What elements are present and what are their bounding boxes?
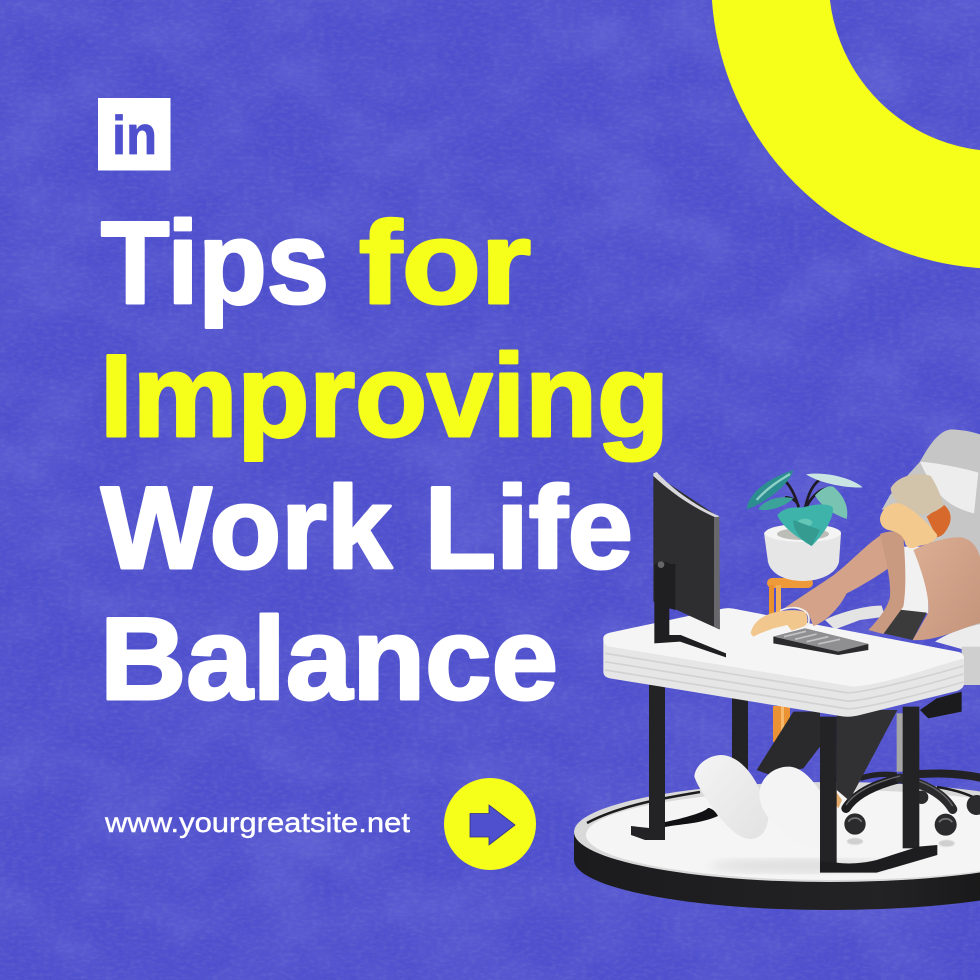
icon: LinkedIn logo: in <box>112 104 157 166</box>
plant stand <box>767 578 813 742</box>
title: Tips <box>101 197 329 328</box>
sleeve cuff <box>780 608 809 627</box>
jacket left side <box>868 532 905 634</box>
beanie hat <box>891 474 943 515</box>
desk <box>603 608 964 717</box>
jacket left arm <box>781 531 904 626</box>
title <box>100 197 669 724</box>
plant leaves <box>747 470 863 546</box>
title: for <box>359 197 531 328</box>
plant pot <box>764 524 841 581</box>
website address: www.yourgreatsite.net <box>104 807 410 838</box>
orange hair <box>927 505 951 537</box>
icon: yellow circle arrow <box>444 778 536 870</box>
icon: LinkedIn logo <box>98 98 170 170</box>
trousers and shoes <box>694 710 897 851</box>
desk rear legs and foot <box>631 685 748 840</box>
round platform <box>574 782 980 910</box>
hand on head <box>880 503 937 548</box>
jacket right side <box>913 537 980 640</box>
dark waistband <box>883 609 927 640</box>
person: jacket, shirt, hands, hat and hair <box>751 474 980 640</box>
keyboard <box>773 628 868 655</box>
desk front legs and foot <box>820 692 962 873</box>
yellow ring arc, top right <box>770 0 980 210</box>
chair back, pillow and arms <box>825 429 980 685</box>
title: Work Life <box>101 462 633 593</box>
white shirt <box>900 547 928 613</box>
illustration: tired person at desk <box>574 429 980 910</box>
title: Balance <box>100 593 558 724</box>
title: Improving <box>100 330 669 461</box>
hand on desk <box>751 610 808 637</box>
computer monitor <box>653 472 726 657</box>
office chair base and casters <box>844 713 980 847</box>
